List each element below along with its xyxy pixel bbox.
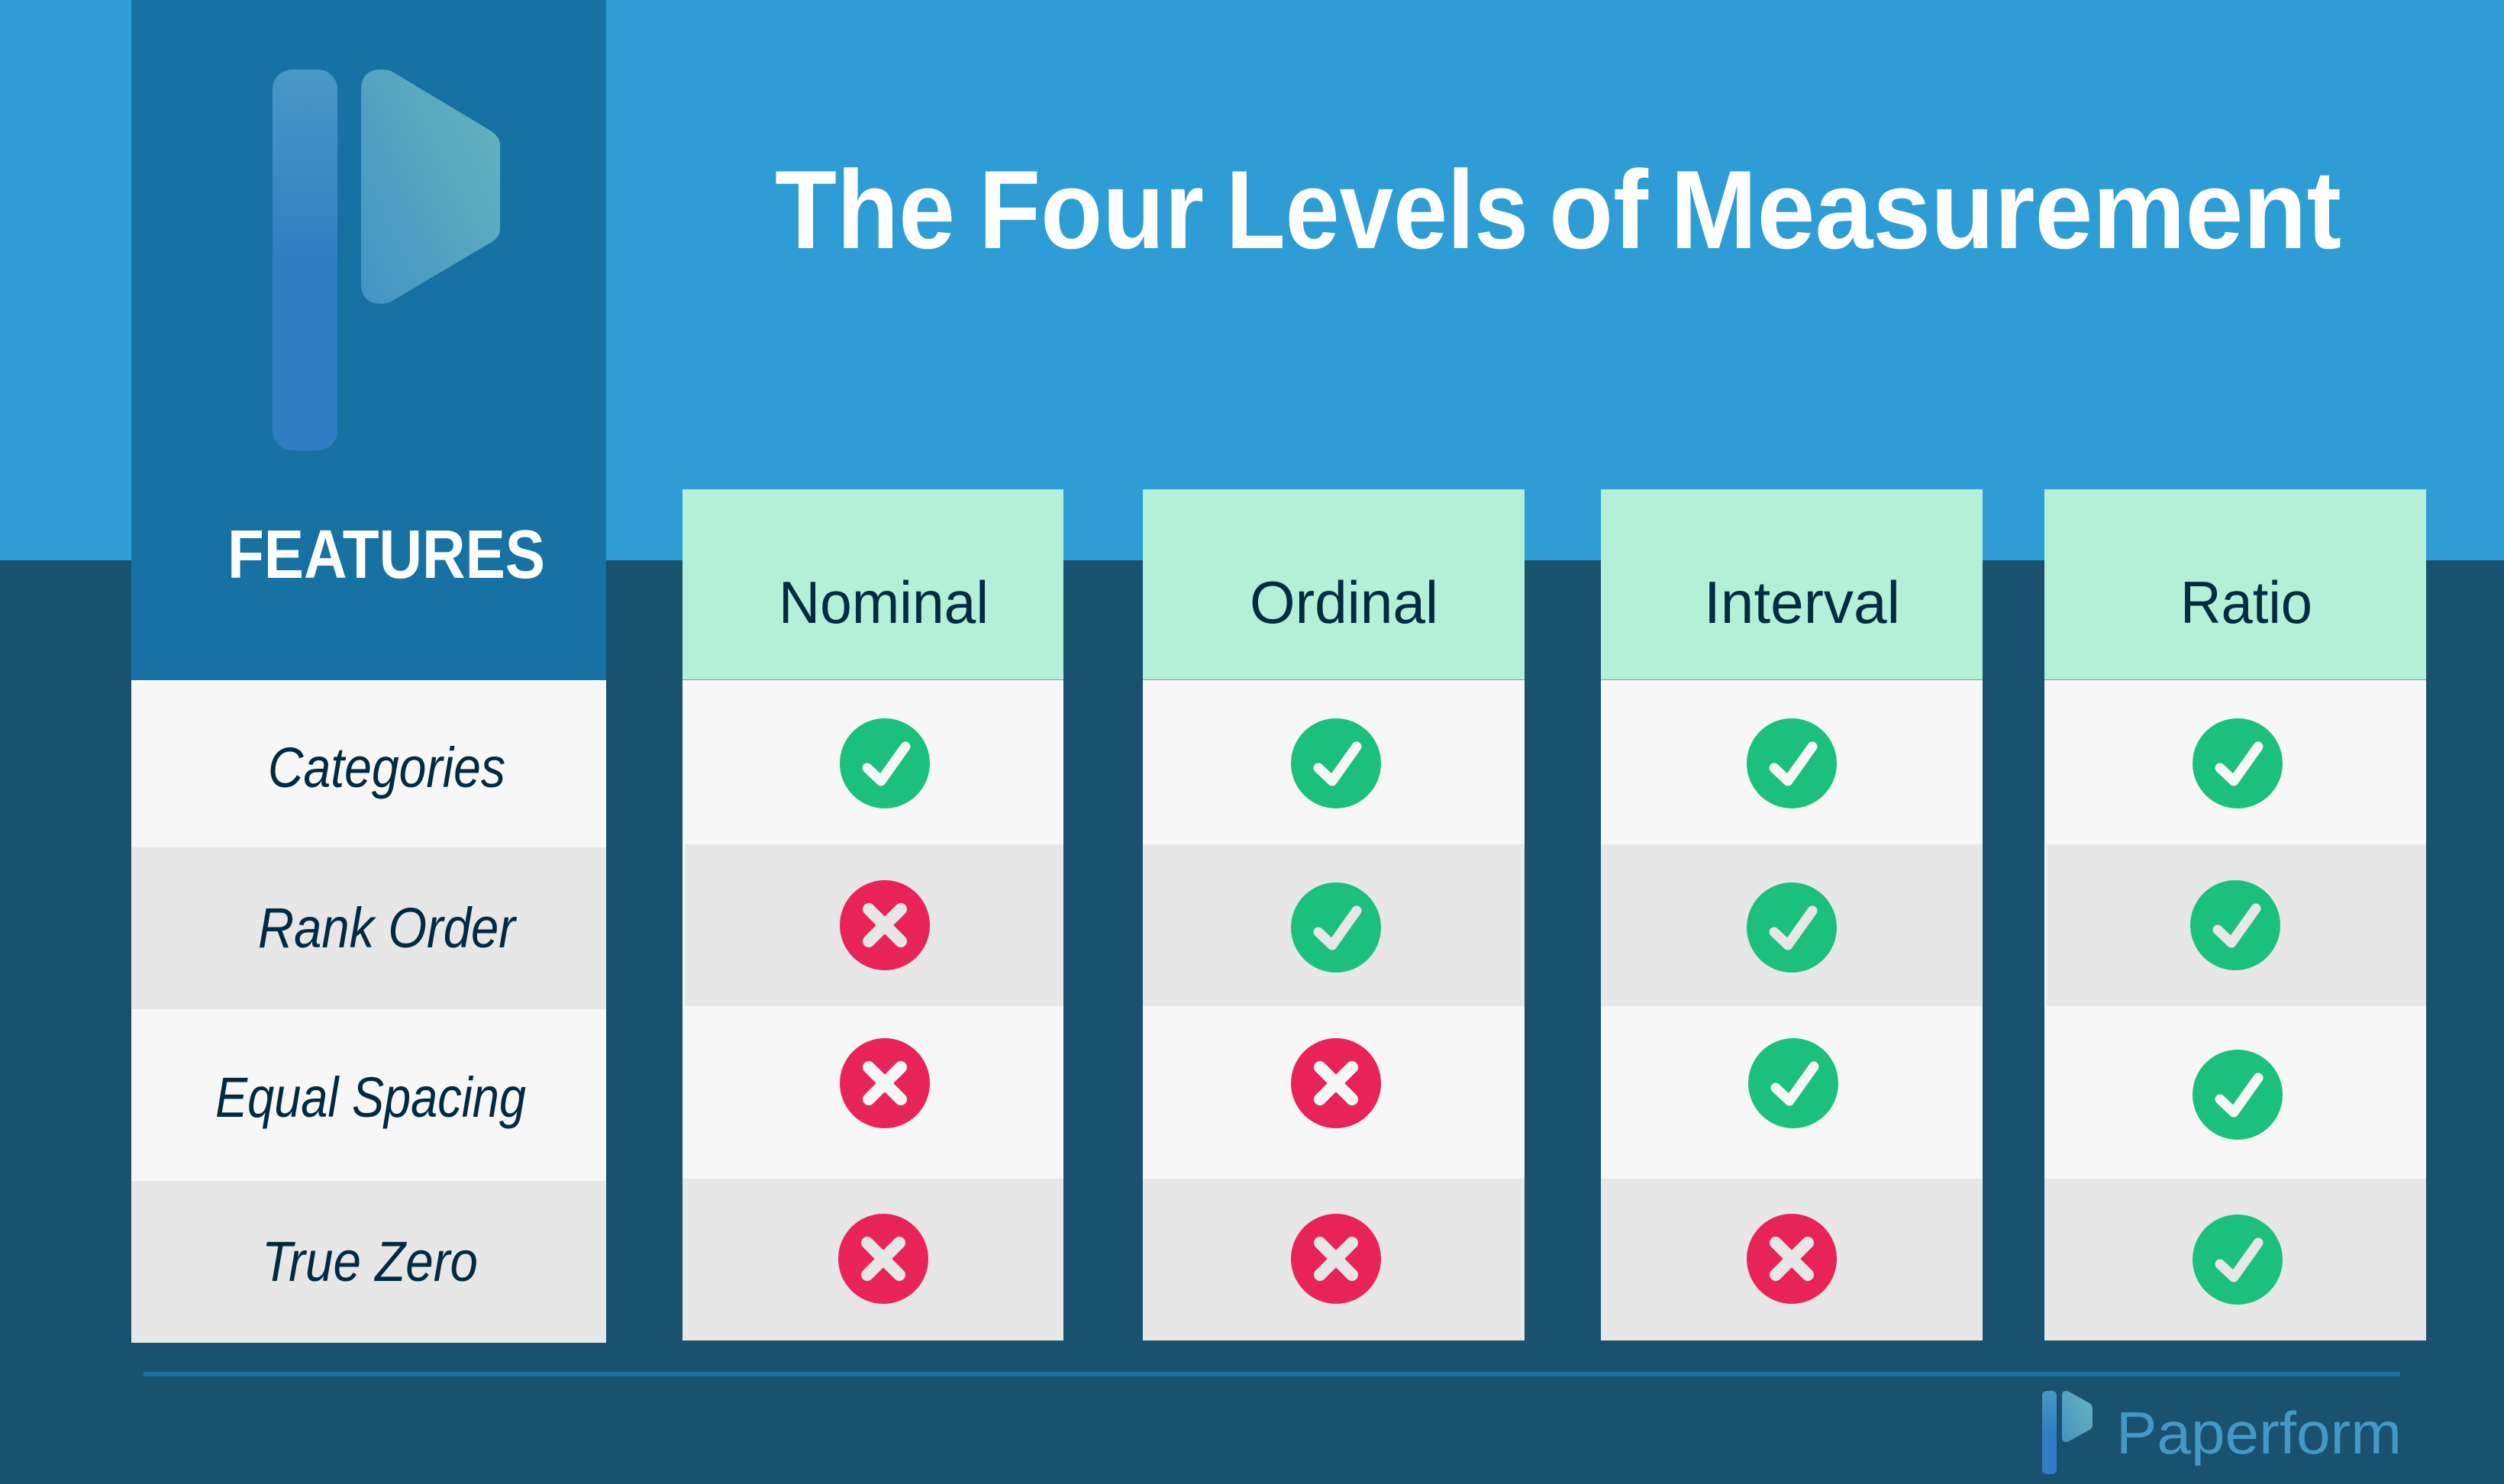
icon: categories yes	[1747, 718, 1837, 808]
icon: small Paperform logo	[2042, 1391, 2093, 1474]
icon: equal spacing yes	[2193, 1050, 2283, 1140]
background: top band	[0, 0, 2504, 560]
icon: large Paperform logo	[273, 69, 500, 450]
panel: feature row labels	[131, 680, 606, 1343]
icon: rank order yes	[1291, 882, 1381, 973]
icon: equal spacing no	[1291, 1038, 1381, 1128]
heading: nominal: Nominal	[779, 569, 989, 636]
icon: equal spacing yes	[1748, 1038, 1838, 1128]
icon: true zero no	[838, 1214, 928, 1304]
icon: categories yes	[840, 718, 930, 808]
label: categories: Categories	[268, 736, 505, 799]
title: Levels	[1226, 147, 1528, 272]
icon: categories yes	[1291, 718, 1381, 808]
icon: rank order yes	[2190, 880, 2280, 970]
title: Four	[979, 147, 1204, 272]
heading: interval: Interval	[1704, 569, 1900, 636]
column: nominal	[682, 489, 1063, 1340]
icon: rank order yes	[1747, 882, 1837, 973]
column: ratio	[2044, 489, 2426, 1340]
icon: true zero no	[1747, 1214, 1837, 1304]
icon: true zero no	[1291, 1214, 1381, 1304]
column: ordinal	[1143, 489, 1525, 1340]
panel: features header	[131, 0, 606, 680]
title: The	[775, 147, 955, 272]
label: equal spacing: Equal Spacing	[215, 1066, 526, 1129]
icon: equal spacing no	[840, 1038, 930, 1128]
heading: ordinal: Ordinal	[1250, 569, 1438, 636]
heading: features: FEATURES	[227, 517, 545, 593]
label: rank order: Rank Order	[258, 896, 518, 960]
background: lower band	[0, 560, 2504, 1484]
footer brand: Paperform logo and wordmark	[2042, 1391, 2402, 1474]
title: Measurement	[1670, 147, 2341, 272]
title	[775, 147, 2341, 272]
icon: categories yes	[2193, 718, 2283, 808]
icon: rank order no	[840, 880, 930, 970]
label: true zero: True Zero	[262, 1230, 478, 1293]
icon: true zero yes	[2193, 1215, 2283, 1305]
wordmark: Paperform: Paperform	[2116, 1399, 2402, 1466]
heading: ratio: Ratio	[2180, 569, 2312, 636]
title: of	[1549, 147, 1648, 272]
column: interval	[1601, 489, 1983, 1340]
